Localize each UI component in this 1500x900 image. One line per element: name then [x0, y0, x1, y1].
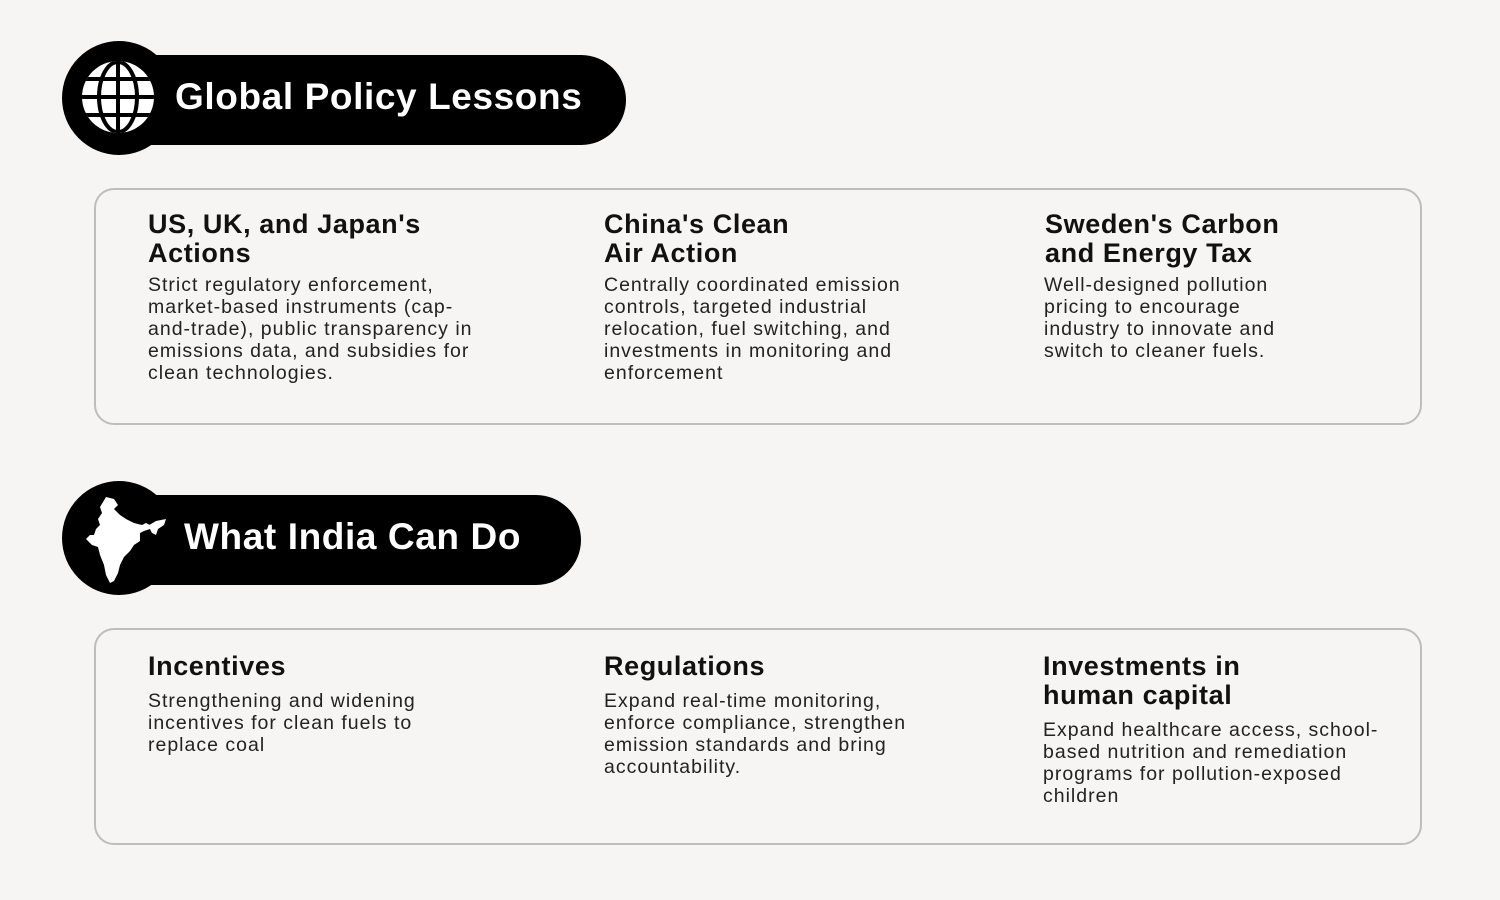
- column: Human capital: Expand healthcare access, school- based nutrition and remediation programs for pollution-exposed children: [1043, 719, 1378, 807]
- column: China: China's Clean Air Action: [604, 209, 789, 268]
- column: Human capital: [1043, 651, 1378, 807]
- title text: What India Can Do: [184, 516, 521, 557]
- column: China: [604, 209, 901, 384]
- header: What India Can Do: [62, 481, 581, 595]
- column: Regulations: [604, 651, 906, 778]
- column: US UK Japan: Strict regulatory enforcement, market-based instruments (cap- and-trade), public transparency in emissions data, and subsidies for clean technologies.: [148, 274, 472, 384]
- column: US UK Japan: [148, 209, 472, 384]
- icon: India map: [86, 497, 166, 583]
- title text: Global Policy Lessons: [175, 76, 582, 117]
- panel: global lessons: [94, 188, 1422, 425]
- column: China: Centrally coordinated emission controls, targeted industrial relocation, fuel switching, and investments in monitoring and enforcement: [604, 274, 901, 384]
- column: Incentives: Incentives: [148, 651, 286, 681]
- panel: India actions: [94, 628, 1422, 845]
- column: Incentives: [148, 651, 416, 756]
- icon: globe: [82, 61, 154, 133]
- column: Sweden: [1044, 209, 1279, 362]
- column: Regulations: Expand real-time monitoring, enforce compliance, strengthen emission standards and bring accountability.: [604, 690, 906, 778]
- column: Sweden: Well-designed pollution pricing to encourage industry to innovate and switch to cleaner fuels.: [1044, 274, 1275, 362]
- column: Sweden: Sweden's Carbon and Energy Tax: [1045, 209, 1279, 268]
- column: Human capital: Investments in human capital: [1043, 651, 1240, 710]
- column: US UK Japan: US, UK, and Japan's Actions: [148, 209, 421, 268]
- header: Global Policy Lessons: [62, 41, 626, 155]
- column: Incentives: Strengthening and widening incentives for clean fuels to replace coal: [148, 690, 416, 756]
- column: Regulations: Regulations: [604, 651, 765, 681]
